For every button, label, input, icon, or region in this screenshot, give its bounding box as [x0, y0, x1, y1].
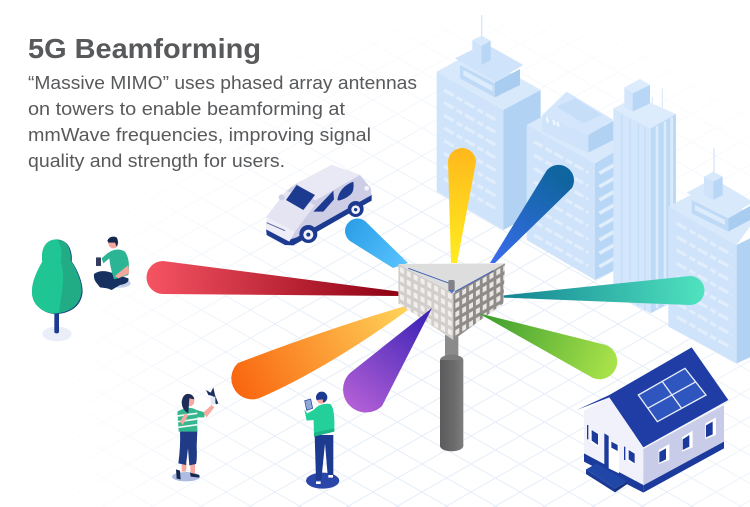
phased array panel [398, 263, 505, 340]
description text: on towers to enable beamforming at [28, 99, 345, 119]
tree [32, 239, 83, 341]
building 3 [613, 79, 676, 313]
beam: teal [488, 276, 704, 305]
beam: dark blue [490, 165, 574, 263]
building 2 [527, 92, 615, 280]
description text: quality and strength for users. [28, 151, 285, 171]
house with solar panels [577, 347, 728, 493]
beam: yellow [448, 148, 476, 263]
tower pole [440, 335, 463, 451]
gable wall [584, 397, 643, 492]
description text [28, 73, 417, 171]
title: 5G Beamforming [28, 33, 261, 64]
background isometric grid [132, 74, 750, 507]
car [266, 165, 372, 245]
woman with phone selfie [172, 387, 218, 481]
beam: light blue [345, 219, 408, 268]
sitting person [94, 237, 131, 290]
roof [577, 347, 728, 447]
antenna tower [398, 263, 505, 451]
house step [586, 463, 627, 488]
beam: purple [343, 308, 432, 412]
description text: mmWave frequencies, improving signal [28, 125, 371, 145]
beam: green [478, 313, 617, 379]
building 4 [668, 148, 750, 363]
solar panel [638, 368, 706, 422]
beam: red [146, 261, 402, 296]
side wall [643, 405, 724, 487]
building 1 [437, 15, 541, 230]
description text: “Massive MIMO” uses phased array antennas [28, 73, 417, 93]
man with phone [304, 392, 339, 489]
door and windows [588, 417, 716, 473]
city buildings [437, 15, 750, 363]
beam: orange [231, 304, 412, 399]
